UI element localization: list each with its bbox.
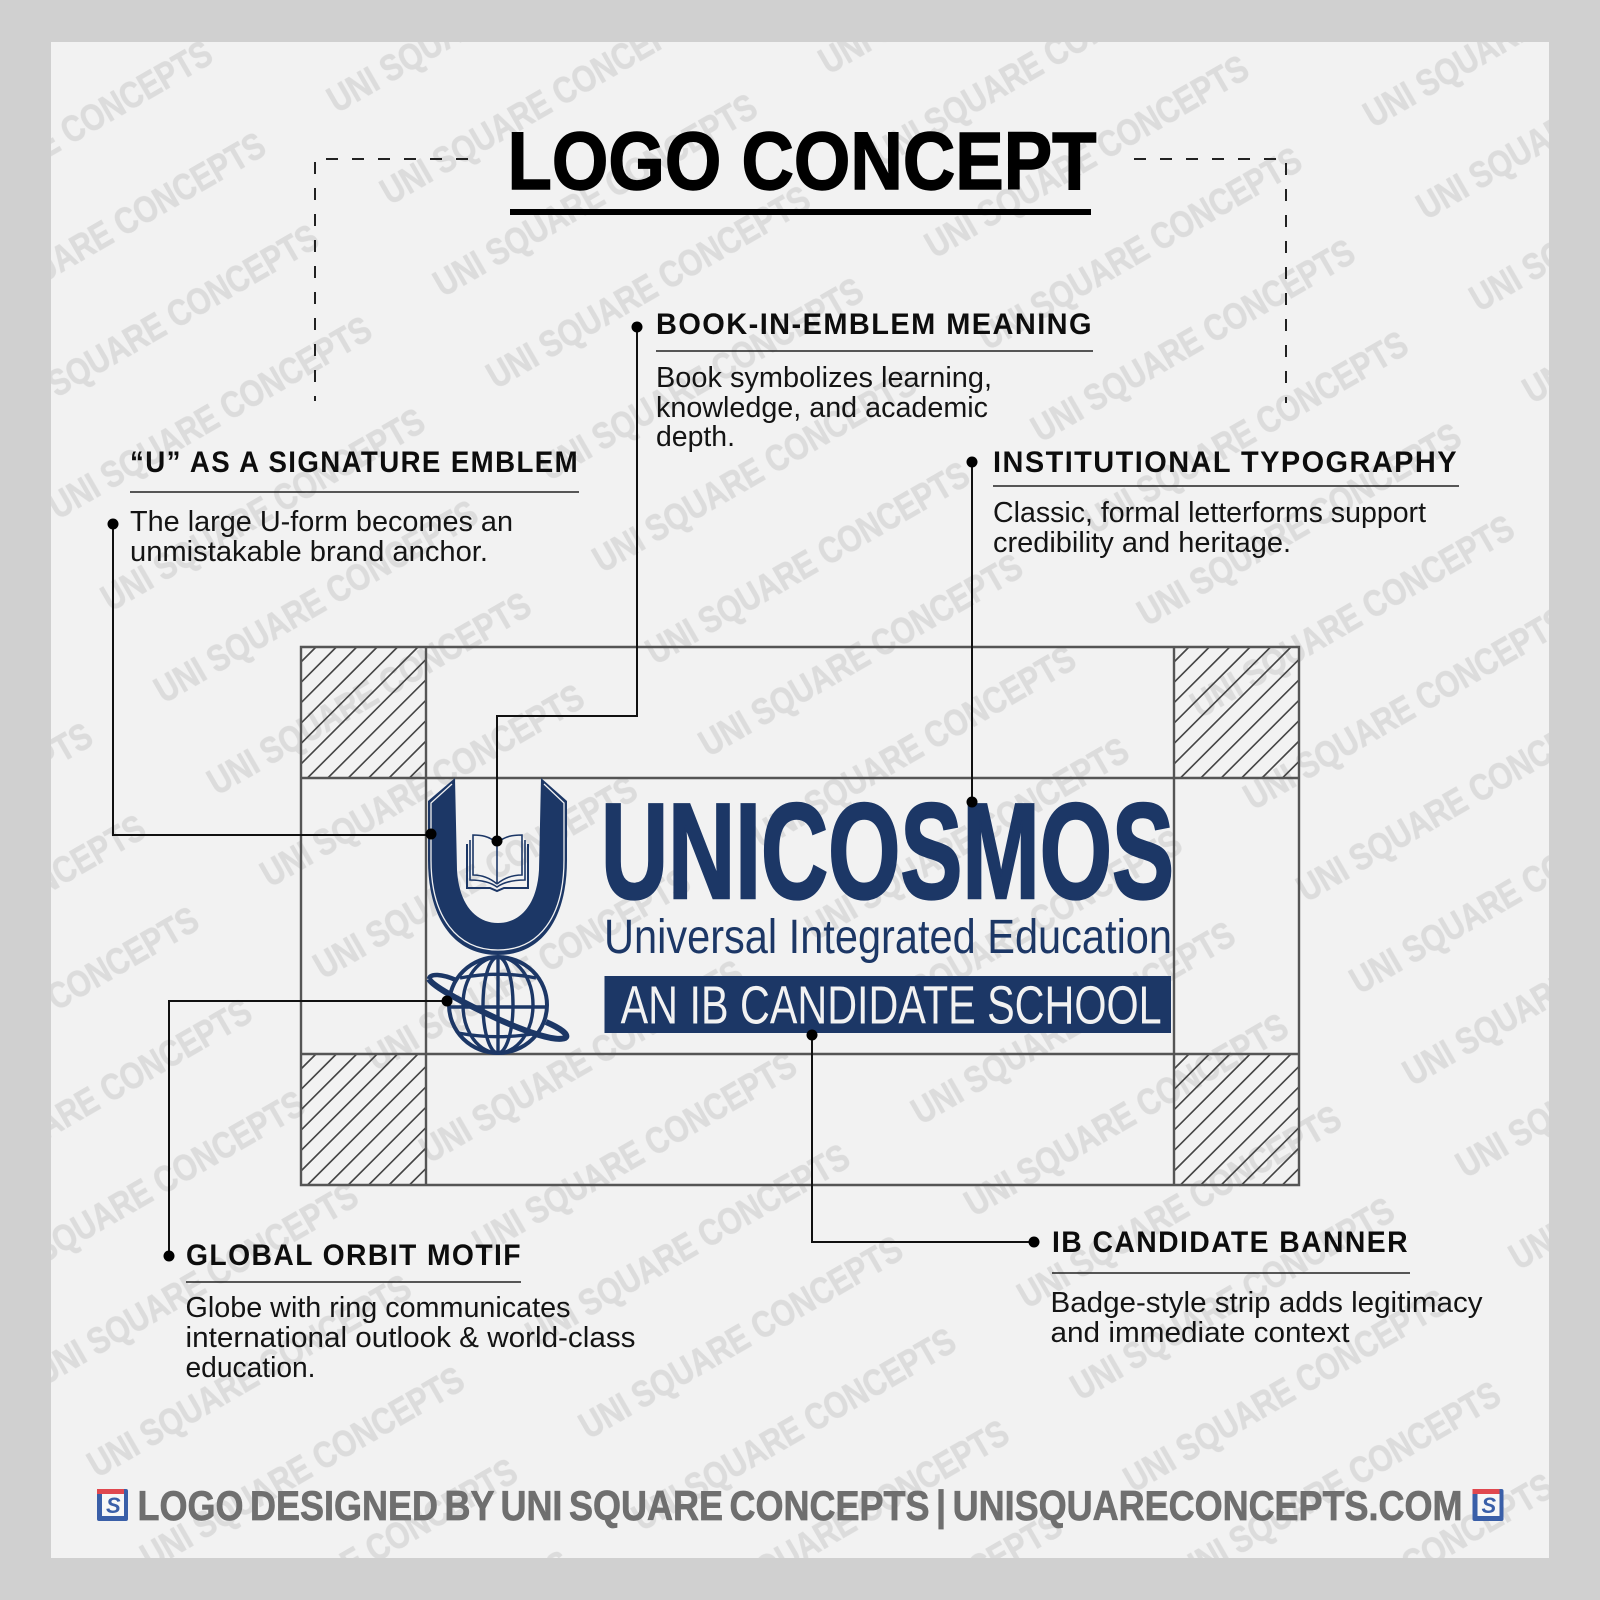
hatched corner: top right xyxy=(1174,647,1299,778)
frame grid lines xyxy=(301,647,1299,1185)
callout: book-in-emblem meaning: knowledge, and academic xyxy=(656,392,988,424)
icon: footer badge right: S xyxy=(1482,1493,1496,1518)
callout: book-in-emblem meaning: Book symbolizes learning, xyxy=(656,362,992,394)
icon: footer badge left: S xyxy=(106,1493,121,1518)
icon: open book xyxy=(467,835,528,891)
icon: footer badge right xyxy=(1472,1489,1504,1521)
callout: U as a signature emblem: unmistakable brand anchor. xyxy=(130,536,488,568)
leader: U emblem xyxy=(108,518,436,840)
callout: U as a signature emblem: The large U-form becomes an xyxy=(130,506,513,538)
leader: globe xyxy=(164,996,452,1262)
callout: global orbit motif: GLOBAL ORBIT MOTIF xyxy=(186,1239,522,1272)
callout: institutional typography: Classic, formal letterforms support xyxy=(993,497,1426,529)
callout: IB candidate banner: IB CANDIDATE BANNER xyxy=(1052,1226,1409,1259)
title dashed bracket xyxy=(315,159,1286,403)
callout: book-in-emblem meaning: BOOK-IN-EMBLEM MEANING xyxy=(656,308,1093,341)
callout: IB candidate banner xyxy=(1050,1226,1483,1349)
callout: institutional typography: INSTITUTIONAL TYPOGRAPHY xyxy=(993,446,1458,479)
leader: banner xyxy=(806,1030,1040,1248)
icon: U emblem xyxy=(428,778,567,955)
leader: typography xyxy=(966,456,978,808)
clear-space frame xyxy=(301,647,1299,1185)
title underline xyxy=(510,209,1091,215)
callout: U as a signature emblem xyxy=(130,446,579,568)
callout: institutional typography: credibility and heritage. xyxy=(993,527,1291,559)
hatched corner: bottom left xyxy=(301,1054,426,1185)
logo: UNICOSMOS xyxy=(428,775,1174,1053)
callout: global orbit motif: international outlook & world-class xyxy=(186,1322,636,1354)
tagline: Universal Integrated Education xyxy=(604,911,1172,964)
callout: book-in-emblem meaning xyxy=(656,308,1093,453)
callout: book-in-emblem meaning: depth. xyxy=(656,421,735,453)
icon: footer badge left xyxy=(97,1489,128,1521)
wordmark: UNICOSMOS xyxy=(601,775,1174,927)
hatched corner: bottom right xyxy=(1174,1054,1299,1185)
banner: AN IB CANDIDATE SCHOOL xyxy=(621,976,1162,1036)
callout: global orbit motif xyxy=(186,1239,636,1384)
callout: global orbit motif: Globe with ring communicates xyxy=(186,1292,570,1324)
callout: U as a signature emblem: “U” AS A SIGNATURE EMBLEM xyxy=(130,446,579,479)
hatched corner: top left xyxy=(301,647,426,778)
icon: globe with orbit ring xyxy=(429,957,566,1053)
title: LOGO CONCEPT xyxy=(508,116,1096,207)
callout: IB candidate banner: Badge-style strip adds legitimacy xyxy=(1050,1287,1483,1319)
leader: book xyxy=(492,322,642,846)
callout: global orbit motif: education. xyxy=(186,1352,316,1384)
callout: IB candidate banner: and immediate context xyxy=(1050,1317,1350,1349)
callout: institutional typography xyxy=(993,446,1459,559)
